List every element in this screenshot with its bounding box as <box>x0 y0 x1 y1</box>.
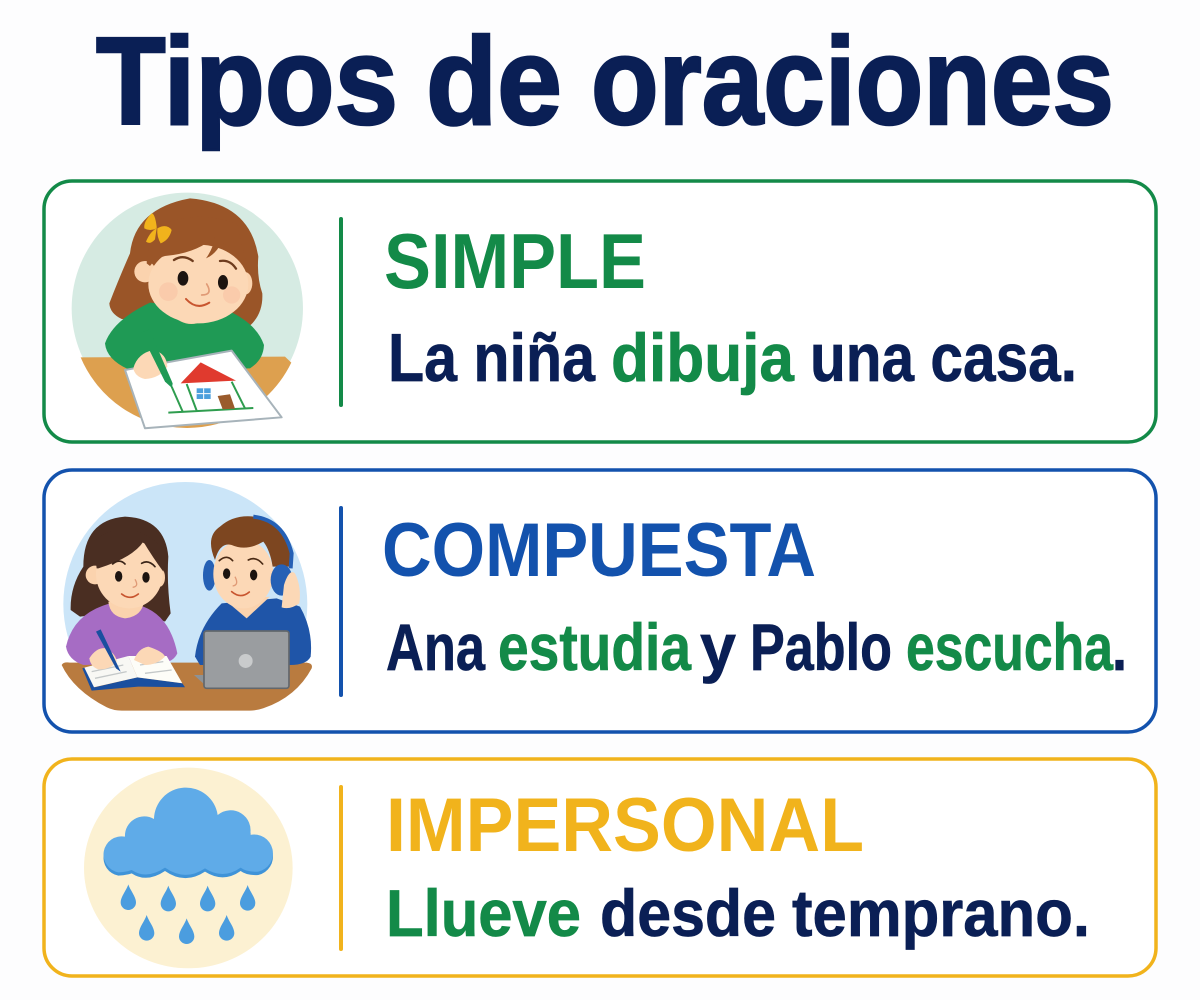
sentence: compuesta: estudia <box>498 610 692 684</box>
heading: simple: SIMPLE <box>384 217 646 305</box>
divider <box>339 217 343 407</box>
heading: compuesta: COMPUESTA <box>382 508 816 593</box>
sentence: impersonal: Llueve <box>386 876 581 950</box>
title: de <box>426 13 562 151</box>
sentence: impersonal <box>386 876 1090 950</box>
sentence: simple: dibuja <box>611 320 795 396</box>
sentence: compuesta: y <box>700 610 736 684</box>
divider <box>339 506 343 697</box>
divider <box>339 785 343 951</box>
sentence: compuesta: Ana <box>386 610 486 684</box>
sentence: compuesta: . <box>1112 610 1127 684</box>
sentence: impersonal: temprano. <box>792 876 1090 950</box>
icon: rain cloud <box>84 768 293 968</box>
sentence: compuesta: escucha <box>906 610 1114 684</box>
title <box>96 13 1114 151</box>
icon: two children studying <box>62 482 312 711</box>
panel: compuesta <box>44 470 1156 732</box>
panel: impersonal <box>44 759 1156 976</box>
sentence: compuesta: Pablo <box>750 610 892 684</box>
sentence: impersonal: desde <box>600 876 776 950</box>
sentence: simple: La niña <box>388 320 596 396</box>
icon: girl drawing a house <box>72 193 303 428</box>
sentence: compuesta <box>386 610 1127 684</box>
title: Tipos <box>96 13 398 151</box>
panel: simple <box>44 181 1156 442</box>
sentence: simple <box>388 320 1077 396</box>
heading: impersonal: IMPERSONAL <box>386 783 864 868</box>
title: oraciones <box>591 13 1114 151</box>
sentence: simple: una casa. <box>810 320 1077 396</box>
